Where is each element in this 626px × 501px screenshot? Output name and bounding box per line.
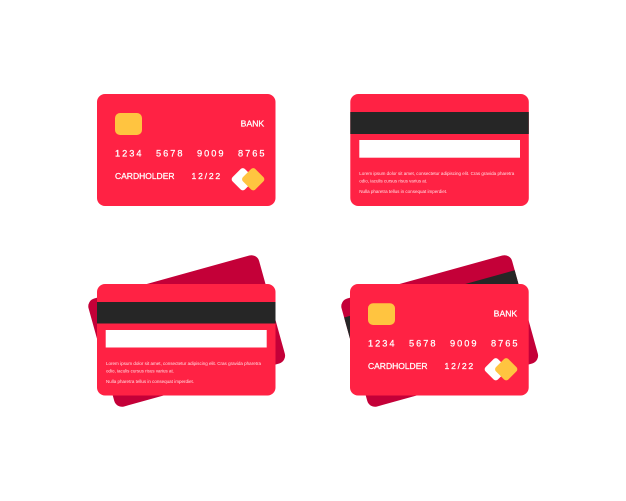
signature panel xyxy=(106,330,267,348)
cardholder label: CARDHOLDER xyxy=(115,171,174,181)
expiry date: 12/22 xyxy=(192,171,222,181)
front card body xyxy=(350,284,529,396)
card number: 8765 xyxy=(238,148,266,158)
fine print: Lorem ipsum dolor sit amet, consectetur adipiscing elit. Cras gravida pharetra xyxy=(106,361,261,366)
cardholder label: CARDHOLDER xyxy=(368,361,428,371)
card number: 9009 xyxy=(197,148,225,158)
icon: chip xyxy=(115,113,142,135)
expiry date: 12/22 xyxy=(444,361,475,371)
card number: 8765 xyxy=(491,338,519,348)
card number: 9009 xyxy=(450,338,478,348)
fine print: odio, iaculis cursus risus varius at. xyxy=(359,178,427,183)
fine print: odio, iaculis cursus risus varius at. xyxy=(106,368,174,373)
card number: 1234 xyxy=(368,338,396,348)
signature panel xyxy=(359,140,520,158)
card front: top left xyxy=(97,94,276,206)
card number xyxy=(115,148,266,158)
card number: 5678 xyxy=(156,148,184,158)
bank label: BANK xyxy=(494,309,518,319)
fine print xyxy=(106,361,261,384)
icon: card network diamonds xyxy=(483,357,519,382)
stacked cards showing front: bottom right xyxy=(339,253,540,409)
magnetic stripe xyxy=(350,112,529,134)
card number: 1234 xyxy=(115,148,143,158)
rear card with stripe xyxy=(339,253,540,409)
front card body xyxy=(97,284,276,396)
fine print xyxy=(359,171,515,194)
card body xyxy=(97,94,276,206)
icon: chip xyxy=(368,303,395,325)
card number: 5678 xyxy=(409,338,437,348)
card back: top right xyxy=(350,94,529,206)
fine print: Nulla pharetra tellus in consequat imperdiet. xyxy=(106,379,194,384)
card body xyxy=(350,94,529,206)
magnetic stripe xyxy=(97,302,276,324)
fine print: Nulla pharetra tellus in consequat imperdiet. xyxy=(359,189,447,194)
bank label: BANK xyxy=(241,119,265,129)
fine print: Lorem ipsum dolor sit amet, consectetur adipiscing elit. Cras gravida pharetra xyxy=(359,171,515,176)
card number xyxy=(368,338,519,348)
rear card xyxy=(86,253,287,409)
icon: card network diamonds xyxy=(230,167,266,192)
stacked cards showing back: bottom left xyxy=(86,253,287,409)
